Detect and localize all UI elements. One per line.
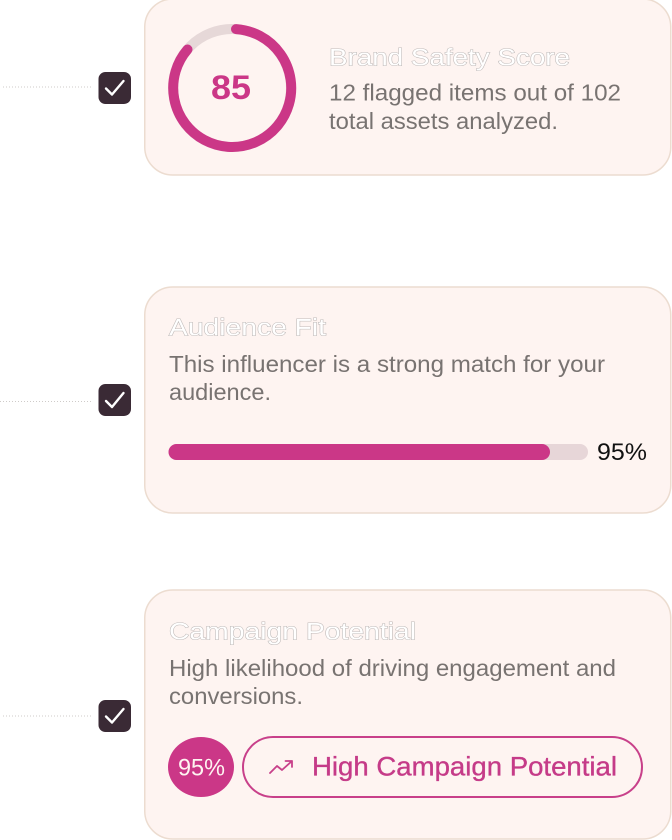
text block: audience fit description: This influencer is a strong match for your [169,351,605,377]
badge: 95 percent [168,737,234,797]
connector: brand safety [3,86,93,88]
text block: audience fit description: audience. [169,379,271,405]
icon: checkbox audience fit [98,384,131,416]
chart: audience progress bar [168,444,588,460]
panel: campaign potential [145,590,671,839]
panel: brand safety score [145,0,671,175]
connector: audience fit [0,400,93,402]
text block: brand safety description [329,80,621,134]
text block: brand safety description: 12 flagged items out of 102 [329,80,621,106]
badge: 95 percent: 95% [178,754,225,782]
pill label: High Campaign Potential [312,752,617,782]
icon: checkbox campaign potential [98,700,131,732]
connector: campaign potential [3,715,93,717]
chart: score ring [173,29,291,147]
text block: campaign potential description [169,655,616,709]
heading: audience fit: Audience Fit [169,314,326,342]
text block: campaign potential description: High likelihood of driving engagement and [169,655,616,681]
score value: 85 [211,69,251,107]
text block: campaign potential description: conversions. [169,683,303,709]
pill: high campaign potential [243,737,642,797]
panel: audience fit [145,287,671,513]
icon: checkbox brand safety [98,72,131,104]
icon: trending up arrow [270,761,292,773]
progress value: 95% [597,439,647,466]
text block: brand safety description: total assets analyzed. [329,108,558,134]
text block: audience fit description [169,351,605,405]
heading: brand safety score: Brand Safety Score [329,44,570,72]
heading: campaign potential: Campaign Potential [169,618,416,646]
